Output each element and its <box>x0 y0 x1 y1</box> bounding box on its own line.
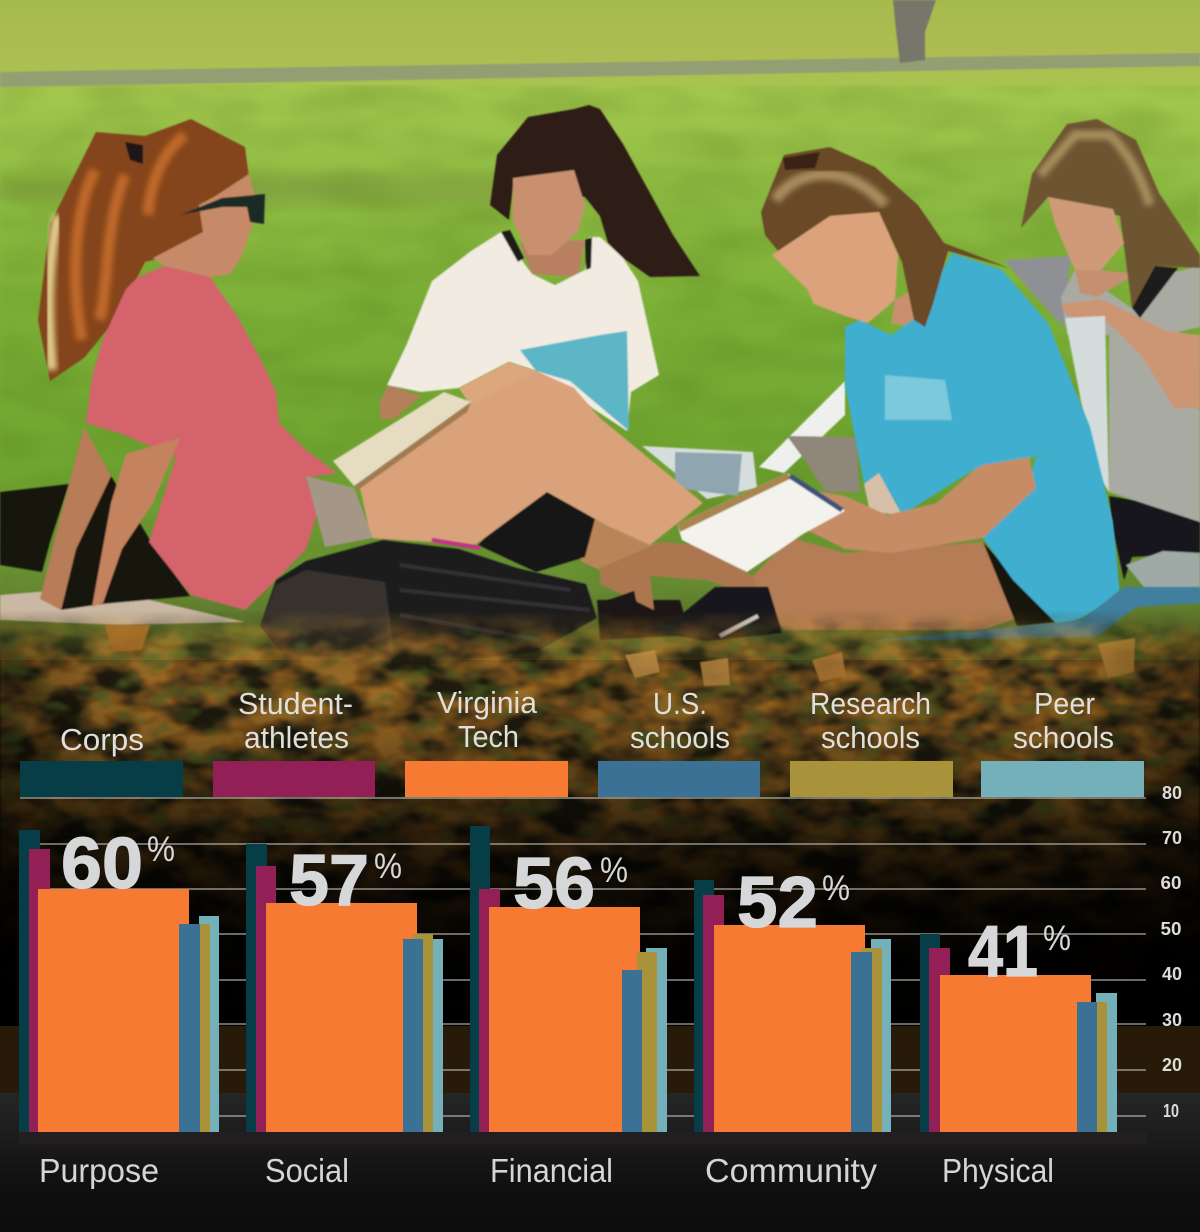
group: Physical: Physical <box>942 1152 1054 1189</box>
group: Financial <box>470 826 667 1189</box>
legend: Research schools <box>790 686 953 797</box>
legend: Research schools: Research <box>810 686 931 721</box>
dark floor panel <box>0 1093 1200 1232</box>
legend: Peer schools: schools <box>1013 720 1114 755</box>
value: 57%: % <box>374 847 402 886</box>
axis labels: 50 <box>1160 919 1182 939</box>
group: Purpose <box>19 824 219 1189</box>
laptop behind blue shirt student <box>642 381 860 499</box>
legend: U.S. schools: schools <box>630 720 730 755</box>
value: 41%: % <box>1043 919 1071 958</box>
seated legs of left student <box>306 362 703 572</box>
legend: Peer schools: Peer <box>1034 686 1095 721</box>
value: 57%: 57 <box>289 841 369 921</box>
bar chart <box>19 783 1182 1189</box>
value: 52%: 52 <box>737 863 818 943</box>
legend: Peer schools <box>981 686 1144 797</box>
value: 56% <box>513 844 628 924</box>
axis labels: 30 <box>1162 1010 1182 1030</box>
legend: Corps <box>20 722 183 797</box>
group: Financial: Financial <box>490 1152 613 1189</box>
value: 60%: 60 <box>61 824 143 904</box>
value: 60%: % <box>147 830 175 869</box>
axis labels: 40 <box>1162 964 1182 984</box>
group: Social: Social <box>265 1152 349 1189</box>
legend: Student-athletes: Student- <box>238 686 353 721</box>
backpack <box>260 540 597 664</box>
value: 56%: 56 <box>513 844 595 924</box>
legend: Student-athletes: athletes <box>244 720 349 755</box>
axis labels: 60 <box>1160 873 1182 893</box>
person: student in blue shirt with notebook <box>597 147 1120 640</box>
legend: Corps: Corps <box>60 722 144 757</box>
person: left student in pink shirt <box>0 119 337 625</box>
axis labels: 10 <box>1163 1101 1179 1121</box>
legend: U.S. schools <box>598 686 760 797</box>
legend: Virginia Tech: Virginia <box>437 685 538 720</box>
axis labels: 80 <box>1162 783 1182 803</box>
axis labels <box>1160 783 1182 1121</box>
group: Community: Community <box>705 1152 878 1189</box>
group: Physical <box>920 912 1117 1189</box>
legend: Student-athletes <box>213 686 375 797</box>
value: 41%: 41 <box>968 912 1038 992</box>
legend: Virginia Tech: Tech <box>458 719 519 754</box>
person: right student in grey shirt <box>1004 119 1200 591</box>
lower brown band of photo <box>0 1026 1200 1093</box>
person: centre student in white shirt <box>379 105 700 431</box>
legend: Virginia Tech <box>405 685 568 797</box>
value: 56%: % <box>600 851 628 890</box>
sneakers <box>600 587 782 641</box>
legend <box>20 685 1144 797</box>
axis labels: 20 <box>1162 1055 1182 1075</box>
legend: U.S. schools: U.S. <box>653 686 707 721</box>
group: Social <box>246 841 443 1189</box>
value: 52%: % <box>822 869 850 908</box>
foreground autumn leaves <box>0 610 1200 1030</box>
group: Purpose: Purpose <box>39 1152 159 1189</box>
axis labels: 70 <box>1162 828 1182 848</box>
axis band <box>19 1132 1147 1144</box>
legend: Research schools: schools <box>821 720 920 755</box>
picnic blanket <box>868 587 1200 641</box>
group: Community <box>694 863 891 1189</box>
